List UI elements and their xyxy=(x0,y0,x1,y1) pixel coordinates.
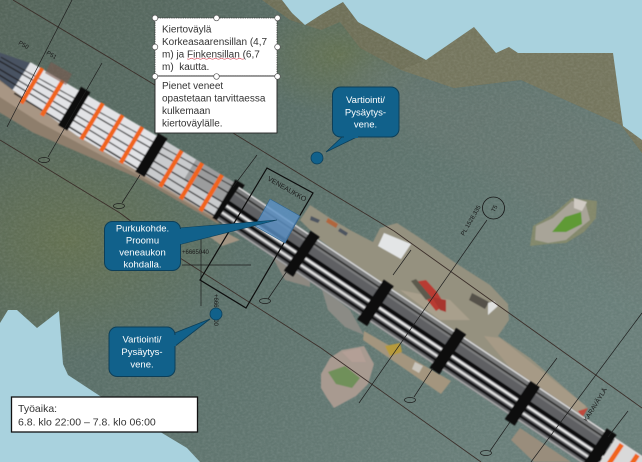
parked vehicles xyxy=(310,216,348,236)
marker: upper patrol boat xyxy=(311,152,323,164)
callout: lower patrol boat: Vartiointi/ xyxy=(123,334,162,346)
text box: detour route: m) ja Finkensillan (6,7 xyxy=(162,50,260,60)
callout: upper patrol boat xyxy=(326,87,399,152)
orange stripes xyxy=(19,66,224,212)
text box: detour route: Korkeasaarensillan (4,7 xyxy=(162,37,267,48)
drawing label: chainage: PL 1528,335 xyxy=(461,204,483,237)
text box: small boats xyxy=(155,76,277,133)
piers xyxy=(58,87,245,224)
bridge: western section with orange stripes xyxy=(0,41,245,240)
map edge: open light-blue area top right xyxy=(282,0,642,140)
drawing labels: pier numbers xyxy=(17,41,58,61)
drawing label: T5 circle: T5 xyxy=(491,204,500,214)
red crane on site xyxy=(414,280,446,312)
map edge: open light-blue area bottom left xyxy=(0,310,200,462)
island: upper right xyxy=(530,198,597,246)
text box: small boats: kulkemaan xyxy=(162,106,210,117)
small reference ovals xyxy=(38,158,492,456)
drawing label: T5 circle xyxy=(482,197,504,219)
island: lower centre xyxy=(321,346,374,408)
text box: detour route: Kiertoväylä xyxy=(162,24,212,36)
deck xyxy=(10,60,162,174)
callout: lower patrol boat: vene. xyxy=(130,360,154,370)
callout: lower patrol boat: Pysäytys- xyxy=(121,347,163,358)
text box: detour route: m) kautta. xyxy=(162,62,209,73)
callout: demolition site: veneaukon xyxy=(119,248,166,258)
callout: demolition site: Purkukohde. xyxy=(116,224,169,234)
walkway under bridge xyxy=(0,70,225,238)
bridge: eastern section xyxy=(213,184,642,462)
dark west end xyxy=(0,46,30,90)
piers xyxy=(283,231,617,462)
deck xyxy=(217,187,642,462)
white tent xyxy=(378,233,411,259)
drawing labels: pier numbers: P51 xyxy=(45,51,58,61)
drawing label: fairway: KARAVÄYLÄ xyxy=(582,386,609,423)
callout: demolition site: kohdalla. xyxy=(123,260,162,270)
veneaukko: boat opening rectangle xyxy=(200,168,313,308)
text box: small boats: kiertoväylälle. xyxy=(162,118,223,130)
text box: working hours xyxy=(12,397,198,432)
text box: working hours: Työaika: xyxy=(18,403,57,415)
spelling underline xyxy=(187,58,244,59)
barge at boat opening xyxy=(255,199,300,243)
callout: lower patrol boat xyxy=(109,319,210,376)
marker: lower patrol boat xyxy=(210,308,222,320)
callout: upper patrol boat: Pysäytys- xyxy=(345,108,386,118)
drawing label: coordinate: +6665040 xyxy=(182,250,210,256)
text box: small boats: Pienet veneet xyxy=(162,81,223,92)
east end white deck and orange stripes xyxy=(594,439,642,462)
callout: demolition site: Proomu xyxy=(126,236,159,246)
text box: detour route xyxy=(155,18,277,76)
text box: working hours: 6.8. klo 22:00 – 7.8. klo 06:00 xyxy=(18,416,156,428)
veneaukko: boat opening rectangle: VENEAUKKO xyxy=(266,176,308,204)
land: work platform south of bridge xyxy=(210,232,571,462)
text box: small boats: opastetaan tarvittaessa xyxy=(162,94,266,104)
deck cables xyxy=(0,49,239,220)
faint demolished pier outline xyxy=(45,62,72,85)
callout: upper patrol boat: vene. xyxy=(354,120,377,130)
callout: demolition site xyxy=(104,220,277,270)
land: construction site north of bridge xyxy=(300,205,588,421)
selection handles on text box xyxy=(152,15,280,79)
drawing label: vertical coordinate: +6665 3100 xyxy=(212,294,218,327)
callout: upper patrol boat: Vartiointi/ xyxy=(346,95,385,106)
deck beams xyxy=(217,187,642,462)
drawing labels: pier numbers: P50 xyxy=(17,41,30,51)
